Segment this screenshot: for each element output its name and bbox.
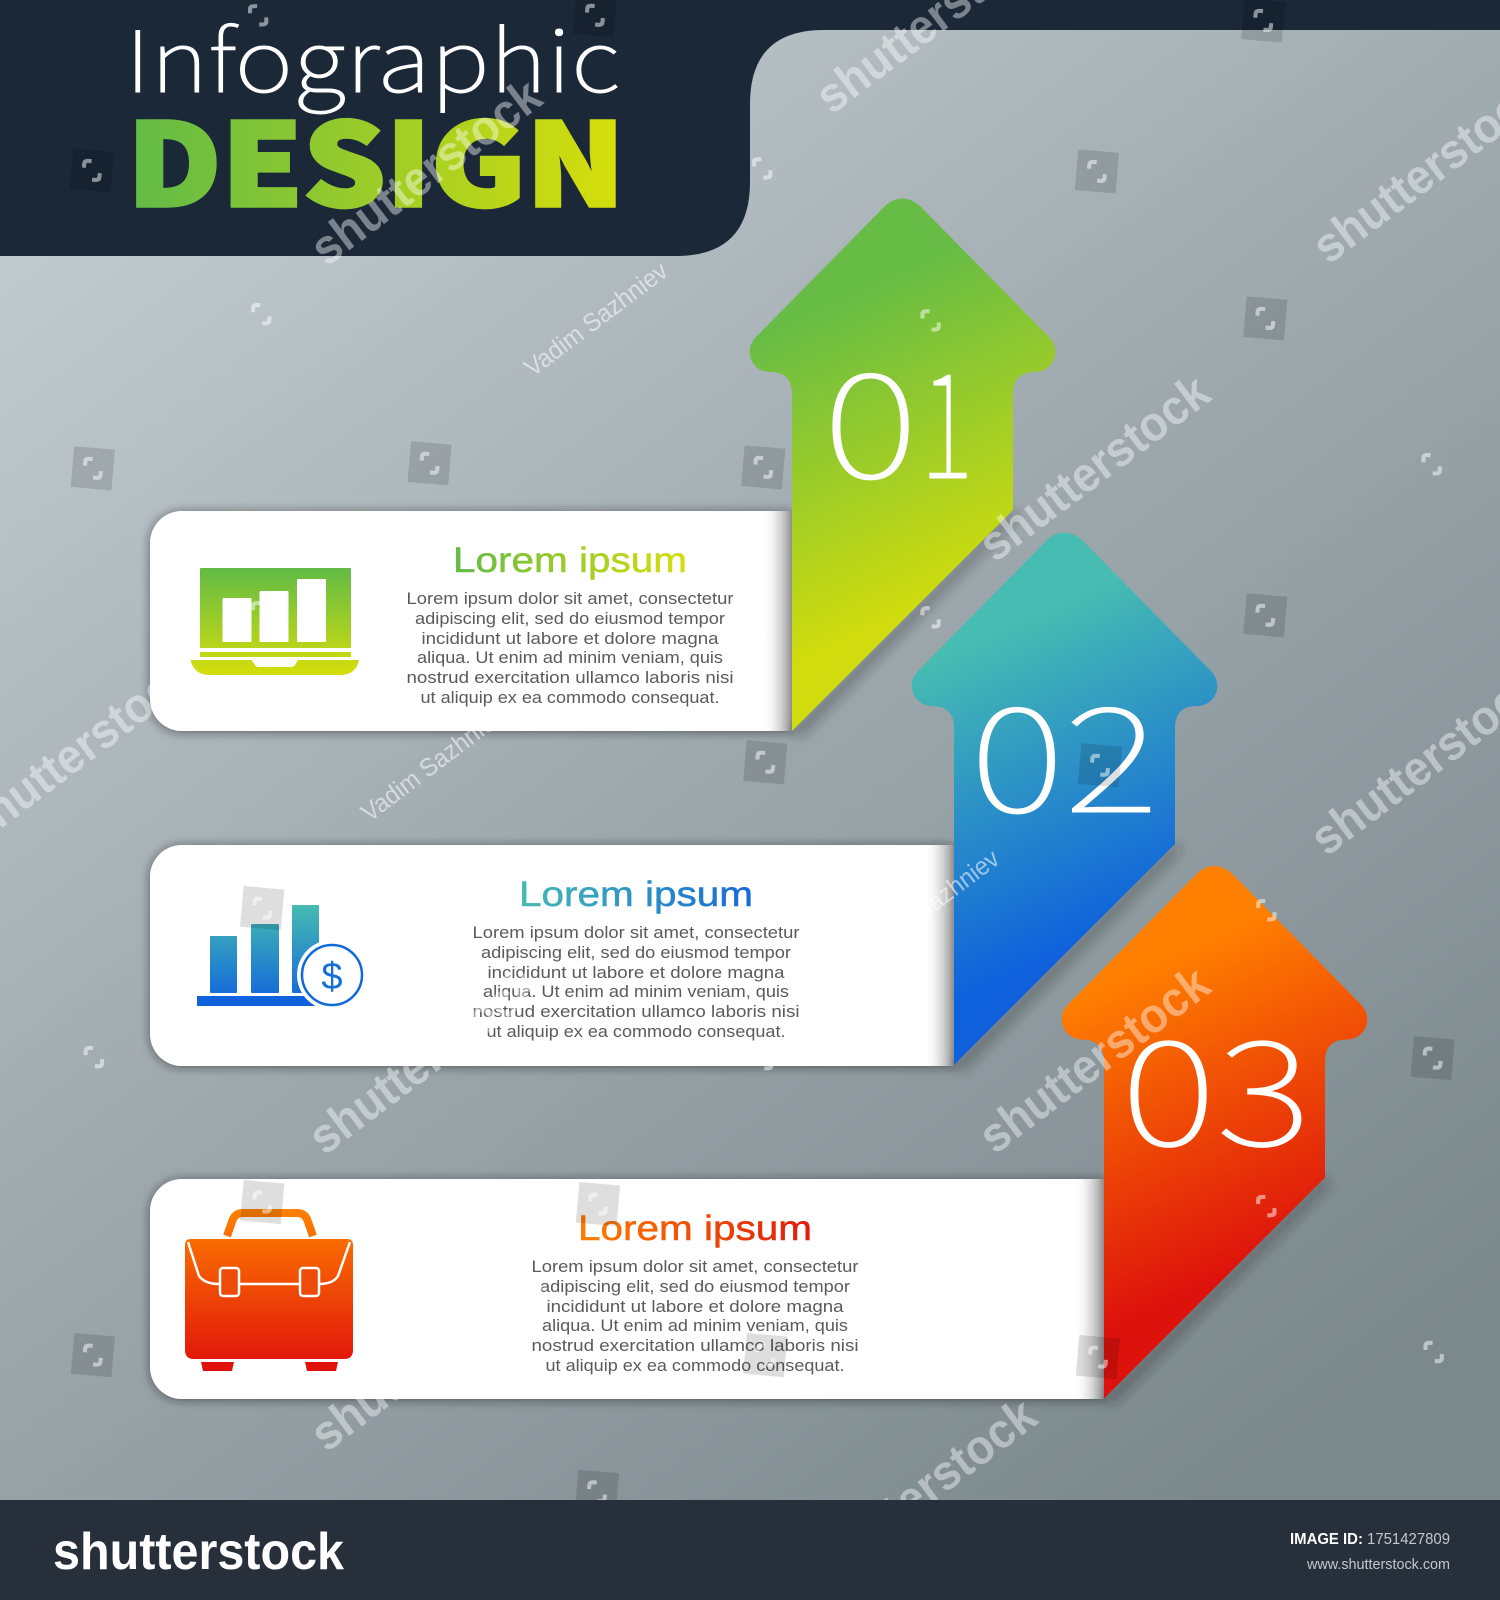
number 01: 0	[823, 308, 918, 520]
card 2 body	[150, 845, 954, 1066]
card 2 text: nostrud exercitation ullamco laboris nisi	[472, 1003, 800, 1021]
arrow 1 shape	[750, 198, 1055, 731]
card 1 text	[406, 590, 734, 707]
number 01: 1	[920, 310, 973, 521]
card 3 text: incididunt ut labore et dolore magna	[546, 1298, 844, 1316]
footer image id: IMAGE ID: 1751427809	[1290, 1531, 1450, 1548]
watermarks: shutterstock	[969, 364, 1220, 572]
card 1 text: nostrud exercitation ullamco laboris nisi	[406, 669, 734, 687]
card 1 text: adipiscing elit, sed do eiusmod tempor	[415, 610, 726, 628]
watermarks: shutterstock	[969, 956, 1220, 1164]
footer logo: shutterstock	[53, 1523, 344, 1581]
number 01	[823, 308, 973, 521]
panel: card 3	[150, 1179, 1104, 1399]
icon: bar chart with dollar coin	[197, 905, 367, 1010]
number 02: 02	[970, 643, 1159, 855]
footer url: www.shutterstock.com	[1306, 1556, 1450, 1573]
number 03: 03	[1121, 976, 1311, 1188]
watermarks: shutterstock	[301, 68, 552, 276]
card 3 text: nostrud exercitation ullamco laboris nisi	[532, 1337, 858, 1355]
arrow 2 shape	[912, 532, 1217, 1065]
panel: card 1	[150, 511, 792, 731]
card 1 text: Lorem ipsum dolor sit amet, consectetur	[406, 590, 734, 608]
card 2 text: ut aliquip ex ea commodo consequat.	[486, 1023, 786, 1041]
arrow 1 diagonal shadow	[792, 510, 1019, 738]
footer bar	[0, 1500, 1500, 1600]
card 1 edge shade	[762, 511, 792, 731]
card 2 text: Lorem ipsum dolor sit amet, consectetur	[472, 924, 800, 942]
panel: card 2	[150, 845, 954, 1066]
header panel	[0, 0, 1500, 256]
icon: briefcase	[185, 1213, 353, 1371]
card 3 edge shade	[1074, 1179, 1104, 1399]
card 2 text	[472, 924, 800, 1041]
card 3 body	[150, 1179, 1104, 1399]
card 3 text: adipiscing elit, sed do eiusmod tempor	[540, 1278, 851, 1296]
card 2 text: adipiscing elit, sed do eiusmod tempor	[481, 944, 792, 962]
arrow 1	[750, 198, 1055, 738]
card 2 text: incididunt ut labore et dolore magna	[488, 964, 785, 982]
card 1 text: ut aliquip ex ea commodo consequat.	[420, 689, 720, 707]
card 2 text: aliqua. Ut enim ad minim veniam, quis	[483, 983, 789, 1001]
watermarks: Vadim Sazhniev	[519, 257, 673, 382]
arrow 3 shape	[1062, 866, 1367, 1398]
card 3 text	[532, 1258, 859, 1375]
arrow 2	[912, 532, 1217, 1072]
card 2 heading: Lorem ipsum	[519, 875, 753, 914]
watermarks: shutterstock	[299, 957, 550, 1165]
card 1 heading: Lorem ipsum	[453, 541, 687, 580]
arrow 2 diagonal shadow	[954, 844, 1181, 1072]
arrow 3	[1062, 866, 1367, 1406]
watermarks: shutterstock	[796, 1387, 1047, 1596]
card 1 text: incididunt ut labore et dolore magna	[422, 630, 719, 648]
title: DESIGN: DESIGN	[127, 74, 625, 239]
card 3 text: ut aliquip ex ea commodo consequat.	[546, 1357, 844, 1375]
icon: laptop with bars	[190, 568, 359, 675]
card 3 heading: Lorem ipsum	[578, 1209, 812, 1248]
icon: bar chart with dollar coin: $	[321, 956, 343, 998]
card 3 text: aliqua. Ut enim ad minim veniam, quis	[542, 1317, 848, 1335]
watermarks: Vadim Sazhniev	[356, 702, 510, 827]
arrow 3 diagonal shadow	[1104, 1178, 1331, 1406]
watermarks: Vadim Sazhniev	[851, 844, 1005, 970]
card 2 edge shade	[924, 845, 954, 1066]
watermarks: shutterstock	[301, 1254, 552, 1462]
card 1 body	[150, 511, 792, 731]
card 1 text: aliqua. Ut enim ad minim veniam, quis	[417, 649, 723, 667]
card 3 text: Lorem ipsum dolor sit amet, consectetur	[532, 1258, 859, 1276]
